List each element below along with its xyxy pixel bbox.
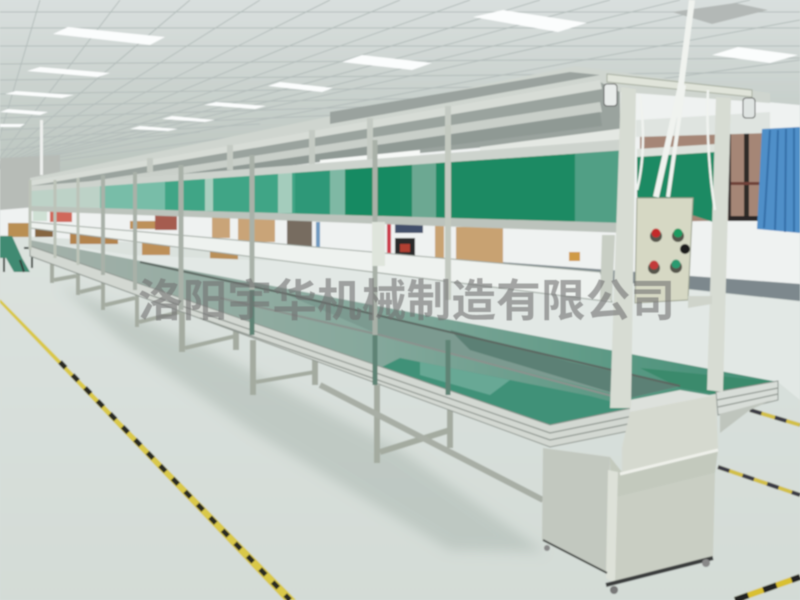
button: green top bbox=[672, 228, 684, 242]
button: green bottom bbox=[670, 260, 682, 273]
watermark text: 洛阳宇华机械制造有限公司 bbox=[138, 277, 675, 326]
wall base band bbox=[500, 262, 800, 301]
cabinet bbox=[542, 390, 772, 594]
selector switch bbox=[680, 244, 690, 254]
floor stripe: left bbox=[0, 299, 296, 600]
button: red bottom bbox=[648, 260, 660, 274]
ceiling vent bbox=[672, 3, 768, 24]
back wall bbox=[0, 90, 800, 288]
board frame bbox=[30, 139, 716, 233]
top crossbar bbox=[607, 74, 752, 97]
floor stripes: right bbox=[718, 410, 800, 600]
white shelf bbox=[30, 222, 612, 302]
upper hood beams bbox=[30, 66, 770, 195]
sign on post bbox=[372, 222, 385, 266]
floor shadow bbox=[60, 285, 545, 552]
background items behind the line bbox=[8, 120, 580, 267]
upright posts along line bbox=[30, 125, 448, 395]
far left wall bbox=[0, 155, 60, 210]
floor behind table bbox=[30, 240, 800, 400]
control box bbox=[635, 198, 693, 303]
button: red top bbox=[650, 228, 662, 242]
ceiling lights bbox=[0, 10, 798, 131]
lower shelf right bbox=[688, 296, 712, 308]
lamps bbox=[604, 84, 755, 118]
tall frame posts bbox=[600, 87, 731, 408]
wall above window bbox=[636, 112, 770, 137]
window bbox=[640, 130, 768, 222]
green board bbox=[30, 149, 716, 225]
table rails bbox=[140, 262, 680, 398]
cables bbox=[637, 0, 715, 210]
green chairs bbox=[0, 236, 32, 272]
far end rail bbox=[716, 381, 778, 415]
table legs and braces bbox=[52, 255, 543, 500]
ceiling bbox=[0, 0, 800, 185]
floor bbox=[0, 230, 800, 600]
curtain bbox=[757, 127, 800, 233]
conveyor table top bbox=[30, 240, 778, 426]
near edge of table bbox=[30, 246, 634, 447]
